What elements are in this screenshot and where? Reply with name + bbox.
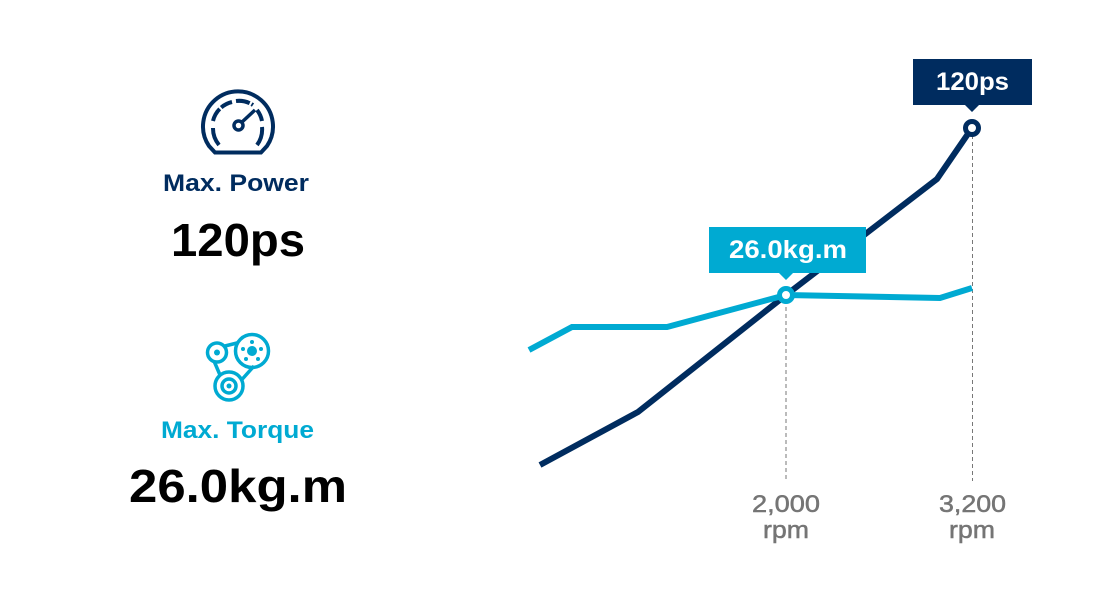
panel: max power (163, 91, 309, 266)
panel: max torque (129, 334, 347, 512)
marker: power peak (966, 122, 978, 134)
axis label: 2,000 rpm: rpm (763, 517, 809, 544)
icon: belt pulleys (208, 334, 268, 400)
line: torque (529, 288, 972, 350)
callout: 26.0kg.m: 26.0kg.m (729, 236, 847, 264)
guide line: 3,200 rpm (972, 135, 974, 481)
axis label: 3,200 rpm (939, 491, 1006, 544)
axis label: 2,000 rpm: 2,000 (752, 491, 820, 518)
marker: torque peak (780, 288, 792, 302)
guide line: 2,000 rpm (785, 300, 787, 481)
callout: 120ps: 120ps (936, 68, 1009, 96)
line chart (529, 59, 1032, 544)
axis label: 3,200 rpm: 3,200 (939, 491, 1006, 518)
callout: 120ps (913, 59, 1032, 112)
value: 26.0kg.m: 26.0kg.m (129, 460, 347, 512)
axis label: 2,000 rpm (752, 491, 820, 544)
axis label: 3,200 rpm: rpm (949, 517, 995, 544)
heading: max power: Max. Power (163, 170, 309, 197)
heading: max torque: Max. Torque (161, 417, 314, 444)
line: power (540, 128, 972, 465)
value: 120ps: 120ps (171, 214, 305, 266)
icon: speedometer (203, 91, 273, 152)
callout: 26.0kg.m (709, 227, 866, 280)
